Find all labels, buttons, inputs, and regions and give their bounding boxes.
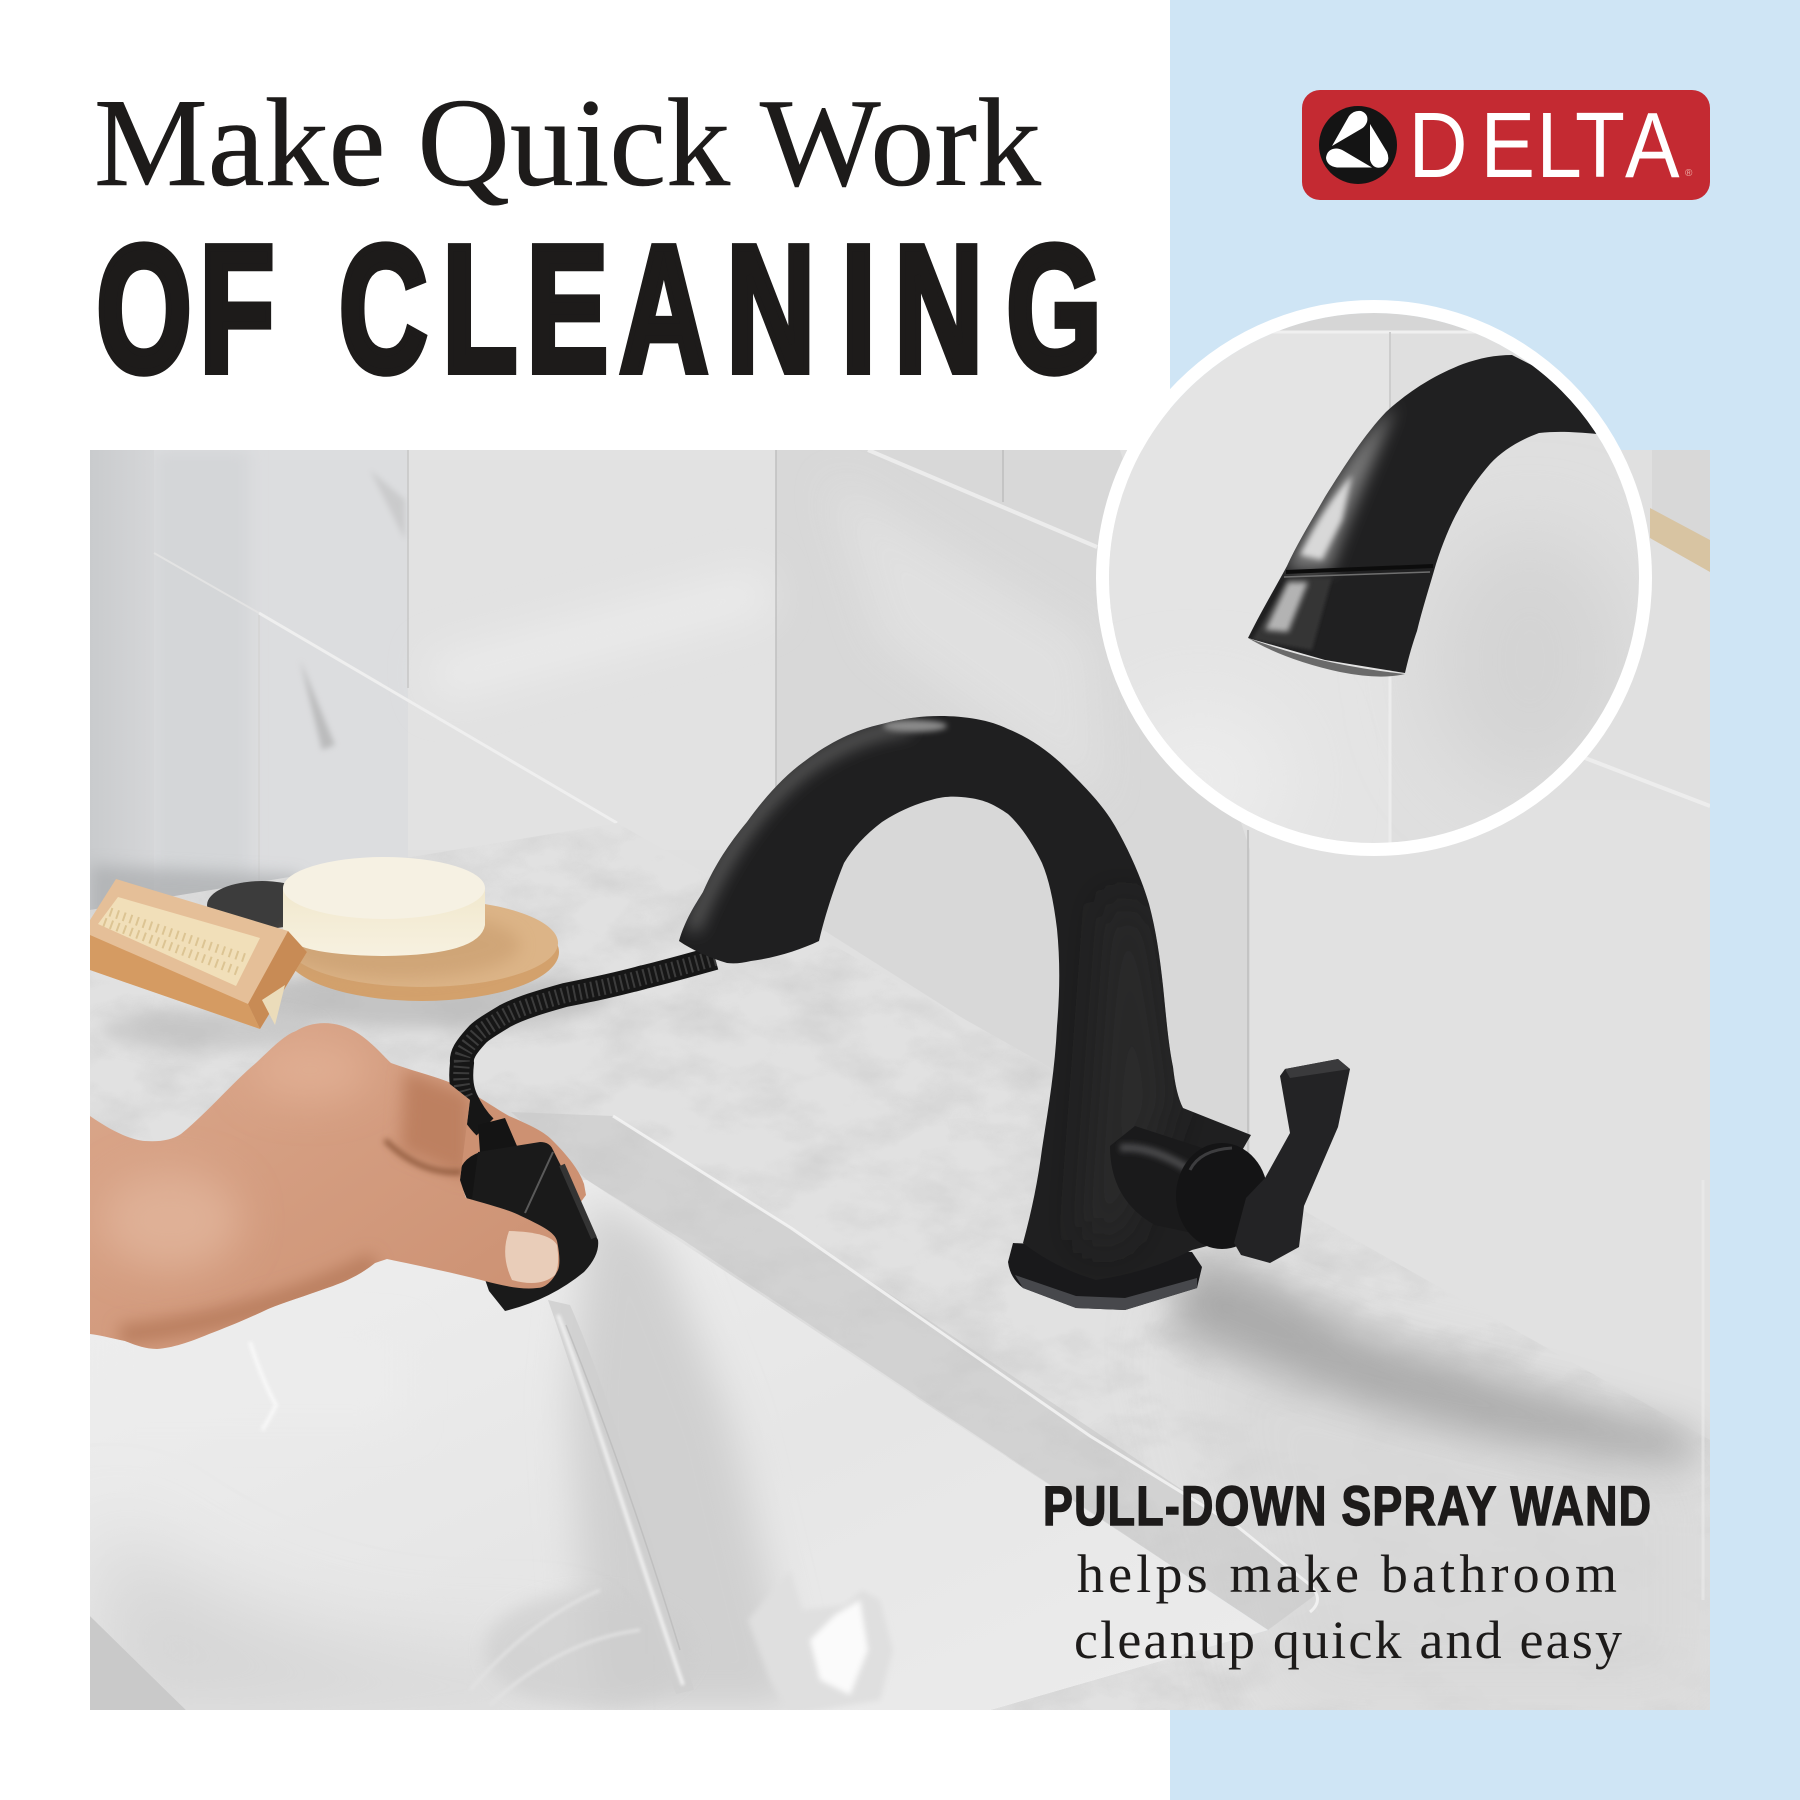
- callout: pull-down spray wand caption: cleanup quick and easy: [1074, 1610, 1622, 1670]
- callout: pull-down spray wand caption: helps make bathroom: [1077, 1544, 1617, 1604]
- title: Make Quick Work: Make Quick Work: [94, 74, 1041, 213]
- gold trim: [1650, 508, 1710, 572]
- hand: [90, 1023, 559, 1349]
- shadow of faucet on counter: [1170, 1250, 1700, 1465]
- logo: Delta: ®: [1685, 168, 1693, 179]
- title: OF CLEANING: OF CLEANING: [96, 208, 1102, 410]
- foam: [750, 1595, 890, 1707]
- callout: pull-down spray wand caption: PULL-DOWN SPRAY WAND: [1043, 1474, 1651, 1537]
- glass reflection at right edge: [1702, 1180, 1704, 1600]
- spray face: [1248, 638, 1405, 677]
- callout: pull-down spray wand caption: [1043, 1474, 1651, 1670]
- faucet base plate: [1008, 1243, 1202, 1310]
- panel: bathroom sink photo: [90, 450, 1720, 1720]
- marble countertop: [90, 820, 1720, 1720]
- nail brush: [90, 879, 320, 1050]
- spout: [1248, 355, 1600, 673]
- hose: [461, 958, 715, 1127]
- logo: Delta: [1302, 90, 1710, 200]
- pull-down spray wand: [459, 1118, 598, 1311]
- water stream and ripples: [489, 1300, 684, 1706]
- soap dish and soap: [207, 857, 610, 1028]
- logo: Delta: DELTA: [1409, 93, 1680, 197]
- lip of the counter: [511, 1112, 1318, 1630]
- blue side panel: [1170, 0, 1800, 1800]
- faucet lever: [1234, 1059, 1350, 1263]
- inset ring: [1102, 306, 1646, 850]
- circular inset: spout close-up: [1100, 300, 1650, 860]
- faucet: [679, 716, 1350, 1310]
- tiled wall: [90, 450, 1710, 1450]
- faucet handle knob: [1110, 1126, 1245, 1240]
- faucet body and spout: [679, 716, 1251, 1280]
- sink basin: [90, 1180, 1268, 1720]
- fingers behind the wand: [446, 1081, 586, 1202]
